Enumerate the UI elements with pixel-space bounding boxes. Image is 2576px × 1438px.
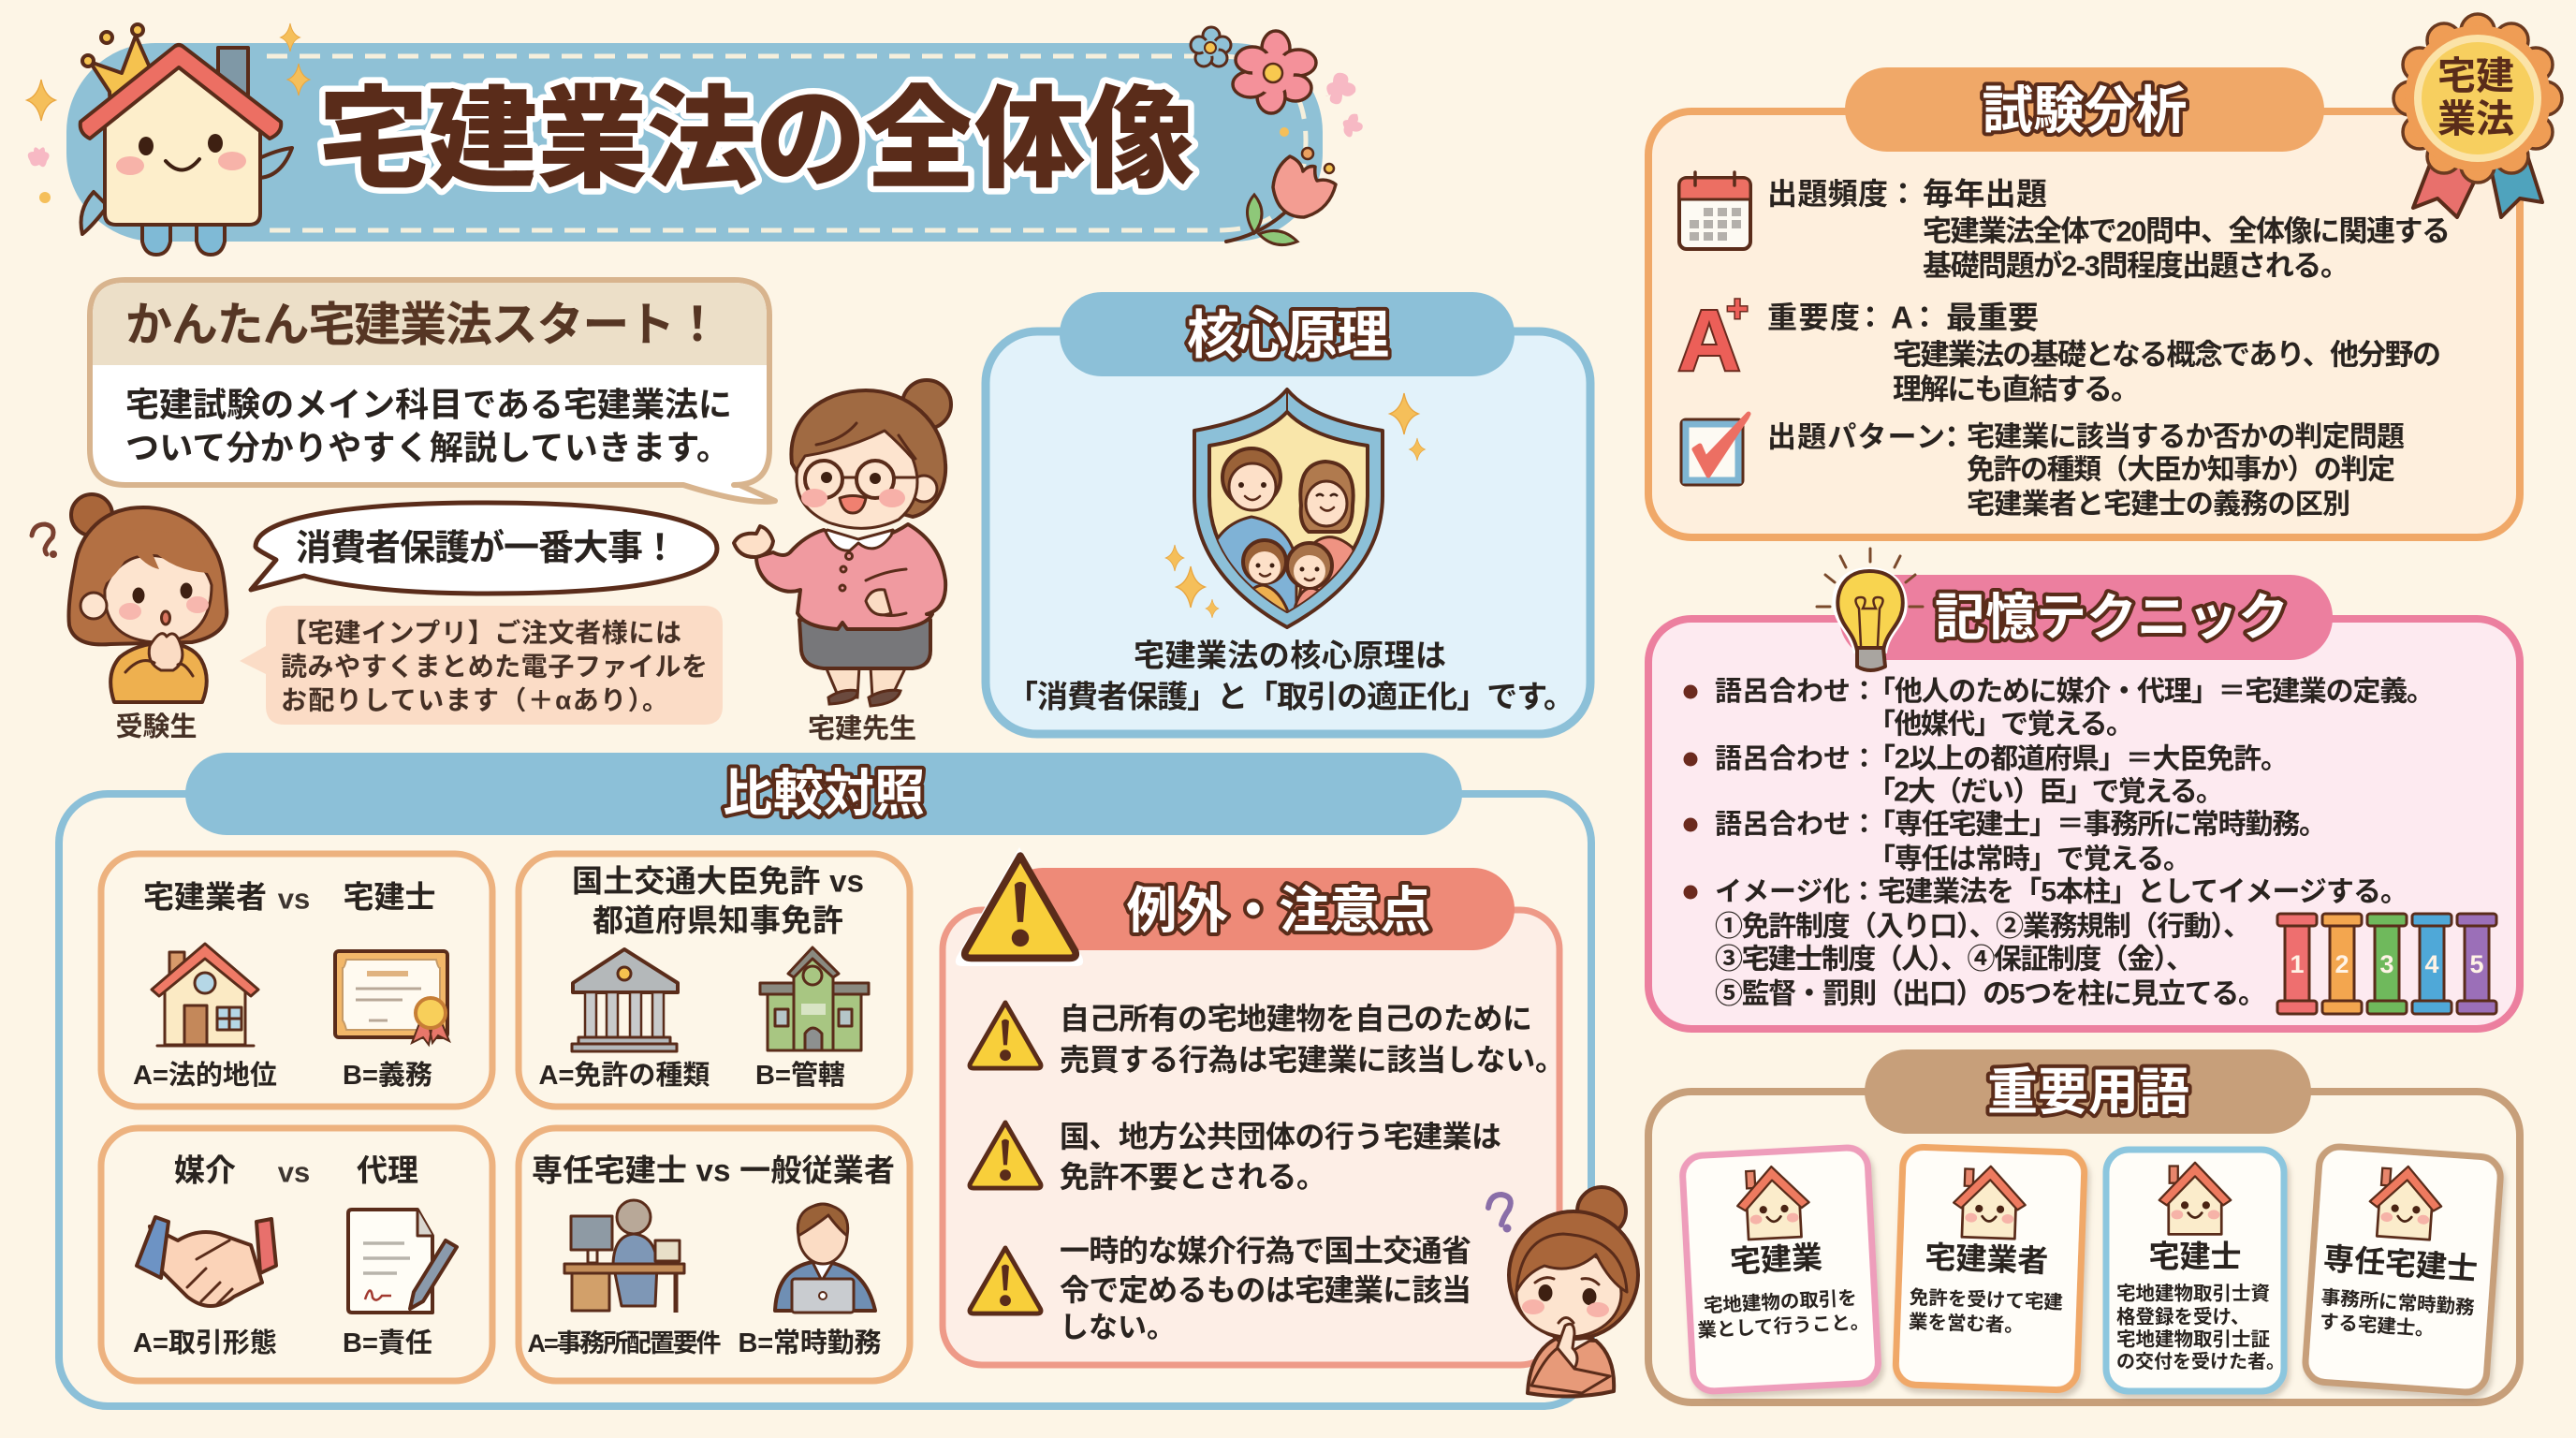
heading pill — [1060, 292, 1515, 376]
panel: exceptions: 売買する行為は宅建業に該当しない。 — [1060, 1043, 1565, 1077]
panel: exam analysis: 出題頻度 — [1767, 177, 1888, 211]
panel: exam analysis: 宅建業に該当するか否かの判定問題 — [1967, 421, 2405, 453]
title text: 宅建業法の全体像 — [318, 79, 1194, 202]
card: 宅建業者 vs 宅建士: 宅建業者 — [143, 880, 267, 914]
icon: certificate — [335, 951, 449, 1045]
card: 宅建業: 宅地建物の取引を — [1703, 1287, 1857, 1317]
card: 宅建士: の交付を受けた者。 — [2116, 1351, 2285, 1372]
callout: oval speech bubble — [251, 503, 717, 594]
text block: goroawase 1: 「他人のために媒介・代理」＝宅建業の定義。 — [1867, 676, 2435, 708]
panel: exceptions: しない。 — [1060, 1311, 1176, 1344]
text block: image method: 宅建業法を「5本柱」としてイメージする。 — [1878, 876, 2408, 908]
icon: A plus: A — [1678, 293, 1740, 389]
text block: image method: イメージ化： — [1715, 876, 1877, 907]
bullets — [1683, 685, 1698, 899]
text block: goroawase 3: 語呂合わせ： — [1715, 809, 1878, 840]
text block: goroawase 1: 「他媒代」で覚える。 — [1867, 710, 2134, 740]
character: student — [32, 494, 227, 742]
text block: goroawase 3: 「専任宅建士」＝事務所に常時勤務。 — [1867, 809, 2327, 841]
text block: goroawase 3 — [1715, 809, 2327, 874]
character: worried girl — [1488, 1187, 1638, 1397]
card: 媒介 vs 代理: B=責任 — [343, 1328, 432, 1358]
text block: goroawase 1: 語呂合わせ： — [1715, 676, 1878, 707]
panel: memory techniques: 記憶テクニック — [1935, 590, 2289, 646]
panel: exceptions: 例外・注意点 — [1127, 883, 1430, 939]
panel: exam analysis: 毎年出題 — [1923, 176, 2047, 212]
callout: peach note — [240, 606, 723, 725]
card: 宅建士: 宅地建物取引士資 — [2116, 1283, 2270, 1305]
text block: goroawase 3: 「専任は常時」で覚える。 — [1867, 844, 2191, 874]
icon: worker with laptop — [775, 1204, 875, 1313]
character: teacher — [734, 380, 951, 744]
icon: family shield — [1194, 389, 1383, 627]
panel: key terms: 重要用語 — [1987, 1064, 2189, 1121]
chart: five pillars — [2277, 914, 2496, 1014]
pillar 5 — [2457, 914, 2496, 1014]
panel: intro speech bubble — [90, 280, 775, 502]
heading pill — [185, 753, 1462, 835]
icon: warning 1 — [970, 1003, 1041, 1068]
callout: peach note: お配りしています（＋αあり）。 — [281, 685, 668, 715]
icon: A plus: + — [1726, 288, 1749, 330]
text block: image method: ③宅建士制度（人）、④保証制度（金）、 — [1715, 944, 2194, 976]
card: 宅建業者 vs 宅建士: A=法的地位 — [133, 1060, 277, 1091]
decorations: flowers — [1191, 27, 1363, 245]
text block: goroawase 1 — [1715, 676, 2435, 740]
panel: exam analysis: 宅建業法全体で20問中、全体像に関連する — [1923, 215, 2451, 247]
icon: sparkles — [1165, 393, 1425, 618]
card: 専任宅建士 vs 一般従業者: B=常時勤務 — [738, 1328, 882, 1358]
icon: medal: 宅建 — [2437, 54, 2514, 97]
card: 媒介 vs 代理: vs — [278, 1155, 310, 1189]
panel: core principle — [986, 292, 1590, 734]
card: 媒介 vs 代理: 媒介 — [174, 1153, 236, 1187]
card: 大臣免許 vs 知事免許: 都道府県知事免許 — [593, 902, 843, 938]
callout: peach note: 【宅建インプリ】ご注文者様には — [281, 618, 681, 648]
panel: core principle: 核心原理 — [1187, 305, 1389, 365]
card: 媒介 vs 代理: A=取引形態 — [133, 1328, 277, 1358]
card: 宅建士 — [2106, 1150, 2285, 1391]
panel: exceptions: 一時的な媒介行為で国土交通省 — [1060, 1234, 1471, 1268]
card: 宅建業: 業として行うこと。 — [1697, 1312, 1870, 1342]
icon: government building — [572, 949, 678, 1051]
panel: exceptions: 免許不要とされる。 — [1060, 1160, 1326, 1194]
card: 宅建業者 vs 宅建士 — [101, 854, 492, 1107]
icon: medal: 業法 — [2437, 97, 2514, 140]
panel: core principle: 「消費者保護」と「取引の適正化」です。 — [1007, 680, 1574, 713]
pillar 4 — [2412, 914, 2452, 1014]
pillar 2 — [2322, 914, 2362, 1014]
icon: checkbox — [1681, 414, 1749, 485]
icon: calendar — [1679, 172, 1750, 249]
icon: warning 3 — [970, 1248, 1041, 1313]
text block: 宅建試験のメイン科目である宅建業法に — [125, 386, 732, 423]
label: 宅建先生 — [808, 713, 916, 744]
icon: house — [152, 944, 258, 1046]
panel: exam analysis: 出題パターン — [1767, 421, 1945, 453]
pillar 4: 4 — [2424, 950, 2439, 978]
pillar 2: 2 — [2334, 950, 2349, 978]
pillar 1 — [2277, 914, 2317, 1014]
panel: exceptions — [943, 847, 1565, 1365]
panel: exam analysis: 宅建業者と宅建士の義務の区別 — [1967, 489, 2350, 521]
card: 大臣免許 vs 知事免許: 国土交通大臣免許 vs — [572, 863, 864, 899]
icon: light bulb — [1817, 549, 1923, 670]
pink flower — [1233, 31, 1316, 113]
panel: key terms — [1648, 1049, 2520, 1402]
icon: warning 2 — [970, 1123, 1041, 1188]
panel: exceptions: 自己所有の宅地建物を自己のために — [1060, 1002, 1532, 1035]
card: 大臣免許 vs 知事免許: B=管轄 — [755, 1060, 845, 1091]
panel: exam analysis: 最重要 — [1946, 300, 2039, 335]
panel: exam analysis: 理解にも直結する。 — [1893, 373, 2140, 406]
card: 専任宅建士: する宅建士。 — [2319, 1311, 2435, 1341]
panel: exam analysis: ： — [1910, 301, 1939, 334]
panel: exam analysis: ： — [1888, 177, 1918, 211]
text block: goroawase 2: 「2大（だい）臣」で覚える。 — [1867, 777, 2224, 807]
callout: oval speech bubble: 消費者保護が一番大事！ — [296, 529, 678, 568]
label: 受験生 — [115, 712, 198, 742]
card: 専任宅建士: 事務所に常時勤務 — [2320, 1287, 2476, 1319]
card: 大臣免許 vs 知事免許: A=免許の種類 — [539, 1060, 710, 1091]
pillar 1: 1 — [2290, 950, 2305, 978]
card: 大臣免許 vs 知事免許 — [519, 854, 910, 1107]
heading pill — [1865, 1049, 2311, 1134]
panel: intro speech bubble: ついて分かりやすく解説していきます。 — [125, 429, 730, 466]
panel: exam analysis: 宅建業法の基礎となる概念であり、他分野の — [1893, 339, 2441, 371]
panel: exceptions: 令で定めるものは宅建業に該当 — [1060, 1273, 1471, 1307]
panel: memory techniques — [1648, 549, 2520, 1029]
icon: prefectural office — [760, 947, 869, 1050]
card: 専任宅建士: 専任宅建士 — [2322, 1241, 2479, 1286]
panel: exam analysis: A — [1891, 300, 1913, 335]
text block: 宅建業法の核心原理は — [1134, 638, 1446, 672]
tulip — [1226, 156, 1336, 245]
card: 宅建業者 vs 宅建士: vs — [278, 882, 310, 916]
pillar 3: 3 — [2379, 950, 2394, 978]
heading pill — [1839, 575, 2333, 660]
card: 専任宅建士 vs 一般従業者 — [519, 1128, 910, 1381]
card: 専任宅建士 — [2305, 1146, 2502, 1393]
card: 宅建業者: 宅建業者 — [1925, 1240, 2049, 1279]
panel: exam analysis: 基礎問題が2-3問程度出題される。 — [1923, 249, 2349, 283]
panel: exam analysis: ： — [1937, 420, 1967, 454]
text block: goroawase 2: 「2以上の都道府県」＝大臣免許。 — [1867, 743, 2289, 775]
callout: peach note: 読みやすくまとめた電子ファイルを — [281, 652, 708, 682]
icon: office desk — [564, 1200, 684, 1313]
card: 宅建業 — [1682, 1147, 1880, 1392]
panel: exam analysis: 免許の種類（大臣か知事か）の判定 — [1967, 455, 2395, 485]
pillar 5: 5 — [2469, 950, 2484, 978]
blue flower — [1191, 27, 1231, 66]
card: 宅建士: 格登録を受け、 — [2116, 1307, 2249, 1328]
icon: medal — [2393, 14, 2562, 217]
icon: house mascot with crown — [80, 24, 292, 255]
card: 専任宅建士 vs 一般従業者: A=事務所配置要件 — [528, 1329, 721, 1357]
text block: image method: ①免許制度（入り口）、②業務規制（行動）、 — [1715, 912, 2251, 942]
card: 宅建業者 — [1895, 1147, 2085, 1390]
card: 宅建業者 vs 宅建士: B=義務 — [343, 1060, 432, 1091]
card: 媒介 vs 代理: 代理 — [357, 1153, 418, 1187]
panel: exam analysis: ： — [1855, 301, 1885, 334]
text block: image method: ⑤監督・罰則（出口）の5つを柱に見立てる。 — [1715, 979, 2266, 1009]
card: 宅建士: 宅地建物取引士証 — [2116, 1329, 2270, 1350]
card: 宅建業: 宅建業 — [1729, 1240, 1823, 1279]
icon: handshake — [137, 1217, 276, 1306]
heading pill — [1002, 868, 1515, 950]
title banner — [66, 43, 1323, 242]
card: 媒介 vs 代理 — [101, 1128, 492, 1381]
panel: comparison: 比較対照 — [723, 766, 925, 822]
heading: かんたん宅建業法スタート！ — [125, 299, 721, 351]
card: 宅建士: 宅建士 — [2149, 1240, 2241, 1273]
text block: goroawase 2 — [1715, 743, 2289, 807]
heading pill — [1845, 67, 2324, 152]
decorations: sparkles — [27, 23, 310, 203]
icon: big warning — [956, 847, 1083, 966]
card: 専任宅建士 vs 一般従業者: 専任宅建士 vs 一般従業者 — [532, 1153, 895, 1187]
panel: exam analysis: 重要度 — [1767, 301, 1860, 334]
icon: signed document — [348, 1210, 457, 1313]
card: 宅建業者: 免許を受けて宅建 — [1909, 1287, 2064, 1313]
card: 宅建業者: 業を営む者。 — [1909, 1312, 2024, 1337]
panel: exam analysis — [1648, 67, 2520, 537]
panel: exam analysis: 試験分析 — [1983, 81, 2187, 139]
card: 宅建業者 vs 宅建士: 宅建士 — [343, 880, 436, 914]
panel: exceptions: 国、地方公共団体の行う宅建業は — [1060, 1120, 1501, 1153]
text block: image method — [1715, 876, 2408, 1009]
pillar 3 — [2367, 914, 2407, 1014]
text block: goroawase 2: 語呂合わせ： — [1715, 743, 1878, 774]
